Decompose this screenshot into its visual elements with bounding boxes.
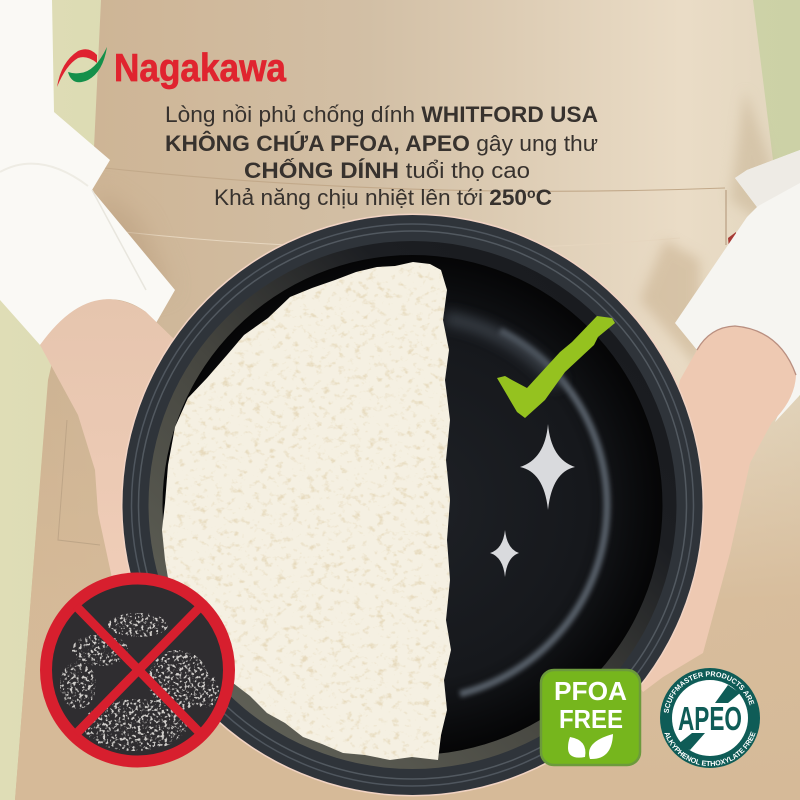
PFOA free badge: [541, 670, 640, 765]
left sleeve: [0, 0, 175, 345]
badge text: PFOA: [554, 676, 627, 706]
red prohibition ring and cross: [46, 578, 229, 762]
cooked rice: [162, 262, 451, 760]
icon: large sparkle: [520, 424, 575, 510]
PFOA free badge: FREE: [559, 704, 623, 734]
icon: small sparkle: [490, 530, 519, 577]
right arm and hand: [620, 326, 796, 692]
rice cooker pot: [121, 214, 704, 796]
diagonal stripe: [677, 685, 740, 750]
pot inner highlight ring: [460, 331, 607, 694]
burnt rice photo: [52, 584, 223, 756]
logo: [57, 47, 286, 90]
line 4: Khả năng chịu nhiệt lên tới 250: [214, 185, 527, 210]
pot interior: [162, 255, 662, 755]
logo wordmark: Nagakawa: [114, 47, 286, 90]
line 4: C: [536, 185, 552, 210]
pot shelf: [148, 241, 676, 769]
line 2: KHÔNG CHỨA PFOA, APEO gây ung thư: [165, 131, 598, 156]
headline text: [165, 102, 598, 210]
right sleeve: [675, 150, 800, 422]
line 3: CHỐNG DÍNH tuổi thọ cao: [244, 157, 530, 183]
line 4: o: [527, 185, 536, 201]
APEO badge: [660, 668, 760, 768]
line 1: Lòng nồi phủ chống dính WHITFORD USA: [165, 102, 598, 127]
left arm and hand: [40, 299, 175, 590]
pot outer rim: [121, 214, 704, 796]
icon: leaves: [568, 734, 613, 759]
ring text top: SCUFFMASTER PRODUCTS ARE: [664, 671, 754, 714]
ring text bottom: ALKYPHENOL ETHOXYLATE FREE: [664, 732, 756, 766]
logo icon: swoosh: [57, 47, 107, 87]
icon: green check mark: [497, 316, 615, 418]
no-sticking warning icon: [45, 578, 229, 762]
APEO label: APEO: [678, 700, 742, 737]
